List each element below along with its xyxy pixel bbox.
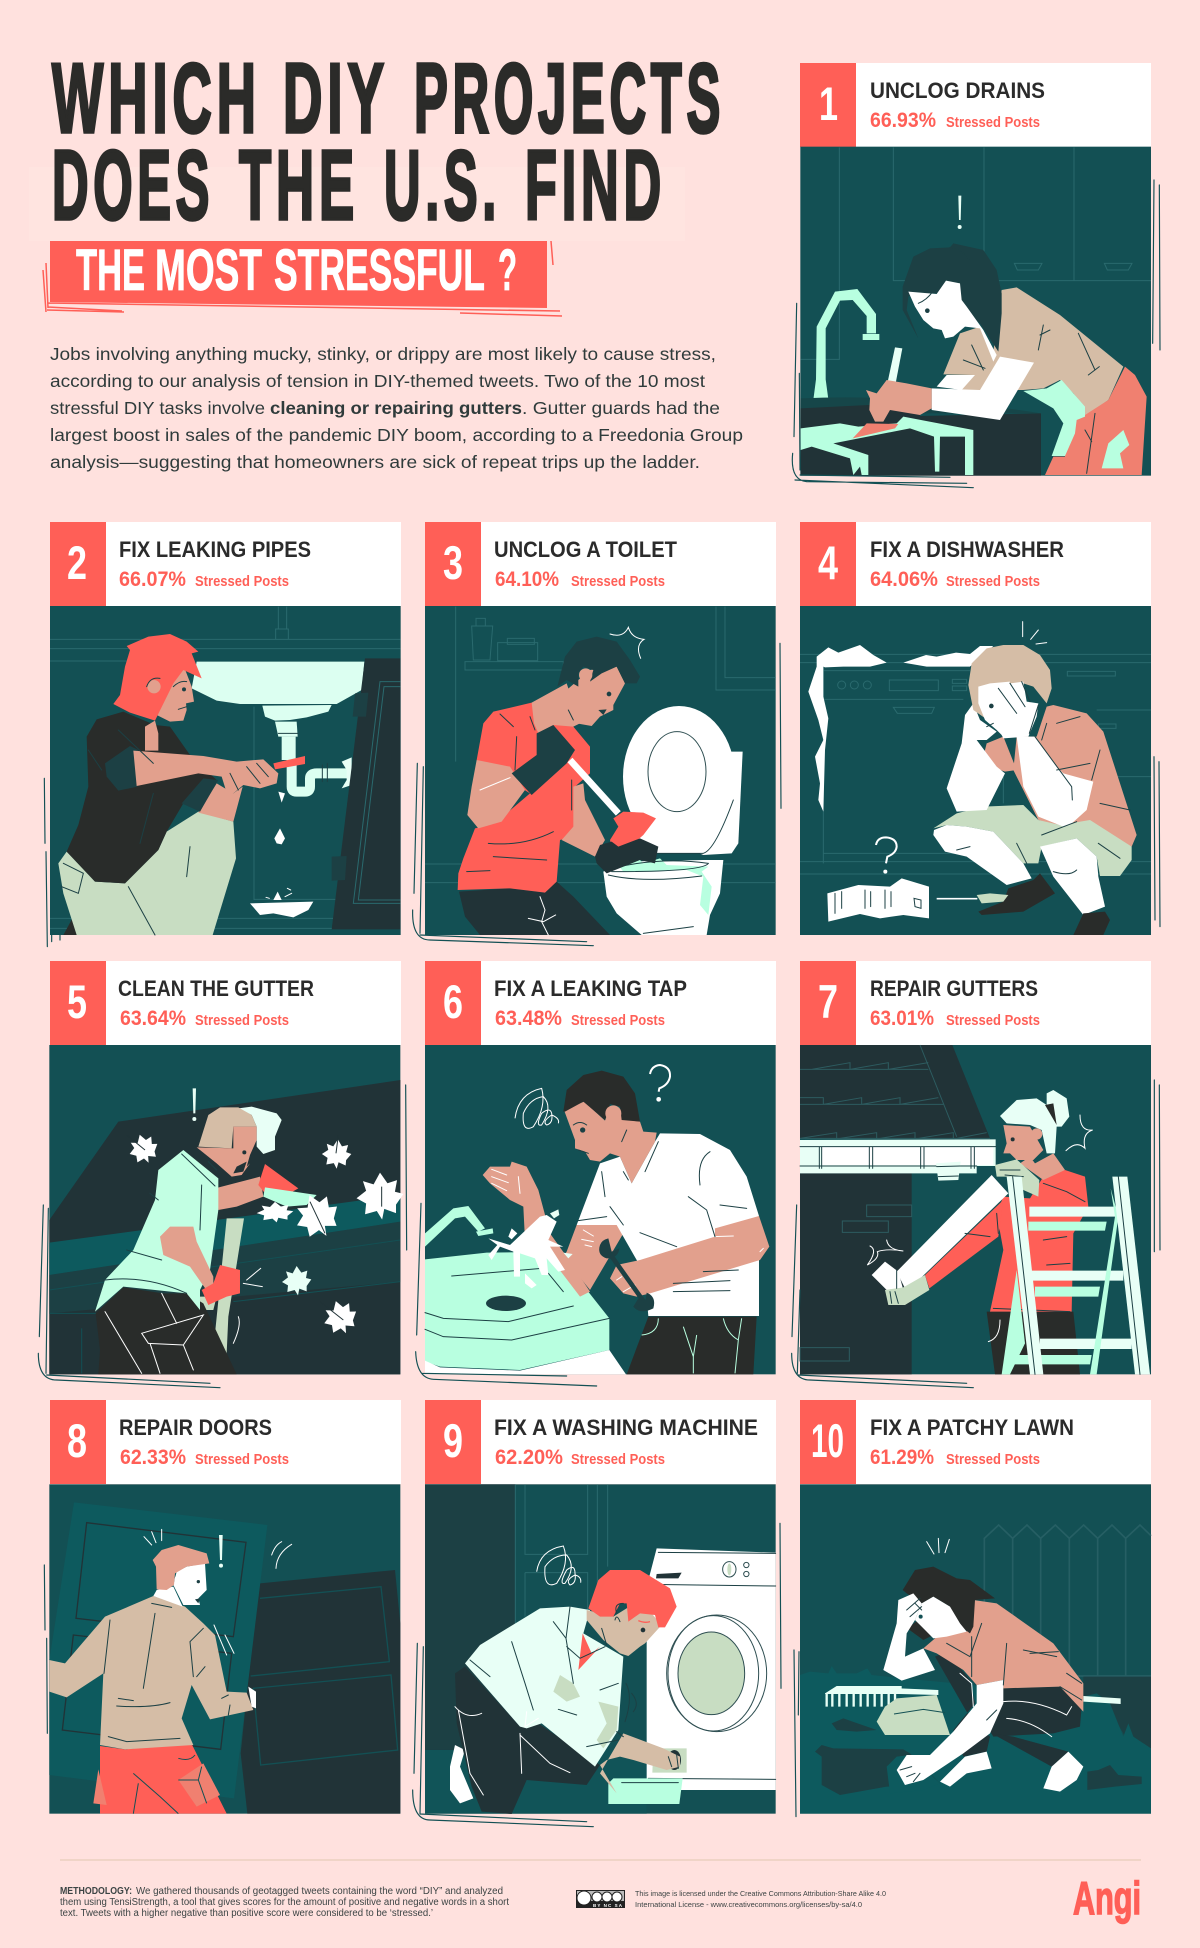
- title: THE: [239, 130, 359, 240]
- panel: 3 unclog a toilet: 3: [443, 536, 463, 589]
- subtitle banner: MOST: [155, 238, 262, 303]
- icon: creative commons badge: [576, 1890, 625, 1908]
- panel: 2 fix leaking pipes: FIX LEAKING PIPES: [119, 537, 311, 562]
- brush strokes: [416, 1203, 597, 1386]
- intro paragraph: stressful DIY tasks involve: [50, 398, 265, 418]
- intro paragraph: . Gutter guards had the: [522, 398, 720, 418]
- subtitle banner: THE: [76, 238, 145, 303]
- panel: 6 fix a leaking tap: 6: [443, 975, 463, 1028]
- intro paragraph: analysis—suggesting that homeowners are sick of repeat trips up the ladder.: [50, 452, 700, 472]
- illustration: woman repairing lawn: [800, 1484, 1151, 1814]
- panel: 8 repair doors: 62.33%: [120, 1446, 186, 1469]
- panel: 2 fix leaking pipes: Stressed Posts: [195, 574, 289, 590]
- panel: 9 fix a washing machine: Stressed Posts: [571, 1452, 665, 1468]
- brush strokes: [413, 643, 781, 946]
- illustration: woman at clogged sink: [800, 147, 1151, 476]
- intro paragraph: Jobs involving anything mucky, stinky, or drippy are most likely to cause stress,: [50, 344, 716, 364]
- methodology note: We gathered thousands of geotagged tweets containing the word “DIY” and analyzed: [136, 1886, 503, 1897]
- illustration: man struggling with doors: [49, 1484, 400, 1814]
- panel: 7 repair gutters: 63.01%: [870, 1007, 934, 1030]
- panel: 7 repair gutters: Stressed Posts: [946, 1013, 1040, 1029]
- panel: 1 unclog drains: Stressed Posts: [946, 115, 1040, 131]
- panel: 1 unclog drains: 66.93%: [870, 109, 936, 132]
- panel: 6 fix a leaking tap: [416, 961, 776, 1386]
- panel: 7 repair gutters: 7: [818, 975, 838, 1028]
- brush strokes: [1154, 757, 1160, 927]
- panel: 4 fix a dishwasher: [800, 522, 1160, 935]
- illustration: woman fixing pipe: [50, 606, 401, 935]
- panel: 10 fix a patchy lawn: Stressed Posts: [946, 1452, 1040, 1468]
- title: DOES: [52, 130, 214, 240]
- license text: International License - www.creativecommons.org/licenses/by-sa/4.0: [635, 1900, 862, 1909]
- illustration: man plunging toilet: [425, 606, 776, 935]
- brush strokes: [38, 1085, 407, 1388]
- panel: 2 fix leaking pipes: 2: [67, 536, 87, 589]
- footer divider: [60, 1859, 1141, 1861]
- panel: 5 clean the gutter: [38, 961, 407, 1388]
- title: [52, 43, 725, 240]
- panel: 9 fix a washing machine: FIX A WASHING MACHINE: [494, 1415, 758, 1440]
- subtitle banner: STRESSFUL: [274, 238, 485, 303]
- panel: 4 fix a dishwasher: 4: [818, 536, 838, 589]
- panel: 10 fix a patchy lawn: FIX A PATCHY LAWN: [870, 1415, 1074, 1440]
- license text: This image is licensed under the Creative Commons Attribution-Share Alike 4.0: [635, 1889, 886, 1898]
- panel: 8 repair doors: Stressed Posts: [195, 1452, 289, 1468]
- panel: 3 unclog a toilet: Stressed Posts: [571, 574, 665, 590]
- panel: 3 unclog a toilet: [413, 522, 781, 946]
- title: DIY: [283, 43, 389, 153]
- title: WHICH: [52, 43, 261, 153]
- panel: 5 clean the gutter: CLEAN THE GUTTER: [118, 976, 314, 1001]
- subtitle banner: ?: [498, 238, 517, 303]
- license text: [635, 1889, 886, 1909]
- panel: 8 repair doors: [44, 1400, 401, 1814]
- panel: 2 fix leaking pipes: [44, 522, 401, 947]
- panel: 5 clean the gutter: 5: [67, 975, 87, 1028]
- panel: 9 fix a washing machine: 62.20%: [495, 1446, 563, 1469]
- logo: Angi: Angi: [1073, 1872, 1141, 1924]
- panel: 1 unclog drains: UNCLOG DRAINS: [870, 78, 1045, 103]
- icon: creative commons badge: BY NC SA: [593, 1903, 623, 1908]
- panel: 10 fix a patchy lawn: 10: [811, 1414, 844, 1467]
- brush strokes: [44, 1565, 47, 1733]
- illustration: man clearing leaves from gutter: [49, 1045, 403, 1374]
- title: U.S.: [384, 130, 501, 240]
- panel: 5 clean the gutter: Stressed Posts: [195, 1013, 289, 1029]
- methodology note: METHODOLOGY:: [60, 1886, 132, 1897]
- brush strokes: [792, 1080, 1160, 1388]
- panel: 7 repair gutters: [792, 961, 1160, 1388]
- brush strokes: [44, 778, 60, 947]
- panel: 1 unclog drains: [792, 63, 1160, 488]
- brush strokes: [413, 1523, 781, 1827]
- panel: 6 fix a leaking tap: FIX A LEAKING TAP: [494, 976, 687, 1001]
- intro paragraph: [50, 344, 743, 472]
- panel: 10 fix a patchy lawn: 61.29%: [870, 1446, 934, 1469]
- panel: 2 fix leaking pipes: 66.07%: [119, 568, 186, 591]
- intro paragraph: largest boost in sales of the pandemic DIY boom, according to a Freedonia Group: [50, 425, 743, 445]
- panel: 1 unclog drains: 1: [819, 77, 838, 130]
- illustration: man at leaking tap: [425, 1045, 776, 1374]
- methodology note: [60, 1886, 509, 1919]
- intro paragraph: according to our analysis of tension in DIY-themed tweets. Two of the 10 most: [50, 371, 705, 391]
- brush strokes: [794, 1650, 799, 1817]
- subtitle banner: [43, 238, 562, 316]
- panel: 4 fix a dishwasher: Stressed Posts: [946, 574, 1040, 590]
- title: PROJECTS: [414, 43, 725, 153]
- panel: 4 fix a dishwasher: 64.06%: [870, 568, 938, 591]
- panel: 8 repair doors: 8: [67, 1414, 87, 1467]
- panel: 10 fix a patchy lawn: [794, 1400, 1151, 1817]
- panel: 4 fix a dishwasher: FIX A DISHWASHER: [870, 537, 1064, 562]
- illustration: woman on ladder repairing gutter: [800, 1045, 1151, 1374]
- panel: 8 repair doors: REPAIR DOORS: [119, 1415, 272, 1440]
- panel: 9 fix a washing machine: [413, 1400, 781, 1827]
- panel: 6 fix a leaking tap: Stressed Posts: [571, 1013, 665, 1029]
- panel: 3 unclog a toilet: UNCLOG A TOILET: [494, 537, 678, 562]
- illustration: man stressed at dishwasher: [800, 606, 1151, 935]
- brush strokes: [792, 180, 1160, 488]
- panel: 5 clean the gutter: 63.64%: [120, 1007, 186, 1030]
- intro paragraph: cleaning or repairing gutters: [270, 398, 522, 418]
- panel: 6 fix a leaking tap: 63.48%: [495, 1007, 562, 1030]
- panel: 3 unclog a toilet: 64.10%: [495, 568, 559, 591]
- methodology note: text. Tweets with a higher negative than positive score were considered to be ‘stressed.’: [60, 1908, 433, 1919]
- title: FIND: [525, 130, 666, 240]
- panel: 7 repair gutters: REPAIR GUTTERS: [870, 976, 1038, 1001]
- panel: 9 fix a washing machine: 9: [443, 1414, 463, 1467]
- illustration: man fixing washing machine: [425, 1484, 776, 1814]
- methodology note: them using TensiStrength, a tool that gives scores for the amount of positive and negative words in a short: [60, 1897, 509, 1908]
